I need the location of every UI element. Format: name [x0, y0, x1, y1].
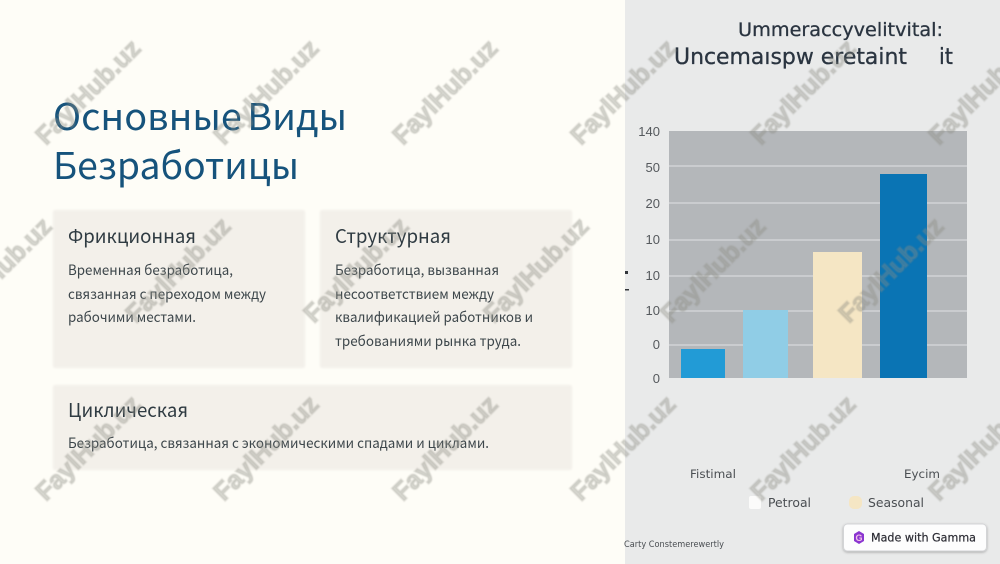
watermark pattern: FaylHub.uz — [565, 34, 681, 150]
panel: structural card: несоответствием между — [335, 284, 495, 304]
chart title: Ummeraccyvelitvital: — [738, 19, 943, 41]
watermark pattern: FaylHub.uz — [298, 212, 414, 328]
bar 1 — [681, 349, 725, 378]
panel: frictional card: Фрикционная — [68, 222, 196, 249]
badge: made with gamma: Made with Gamma — [871, 530, 976, 544]
watermark pattern: FaylHub.uz — [387, 34, 503, 150]
y axis labels: 20 — [646, 196, 660, 211]
watermark pattern: FaylHub.uz — [208, 390, 324, 506]
panel: structural card — [320, 210, 572, 368]
panel: structural card: Структурная — [335, 222, 451, 249]
panel: structural card: Безработица, вызванная — [335, 260, 499, 280]
y axis labels: 10 — [646, 232, 660, 247]
panel: cyclical card: Циклическая — [68, 396, 188, 423]
bar 3 — [813, 252, 862, 378]
icon: gamma logo: G — [855, 533, 863, 543]
watermark pattern: FaylHub.uz — [655, 212, 771, 328]
legend: Seasonal — [868, 496, 924, 510]
y axis labels: 10 — [646, 303, 660, 318]
panel: cyclical card: Безработица, связанная с экономическими спадами и циклами. — [68, 433, 489, 453]
y axis labels: 50 — [646, 160, 660, 175]
watermark pattern: FaylHub.uz — [833, 212, 949, 328]
watermark pattern: FaylHub.uz — [478, 212, 594, 328]
watermark pattern: FaylHub.uz — [208, 34, 324, 150]
legend: Petroal — [768, 496, 811, 510]
y axis labels: 10 — [646, 268, 660, 283]
x axis labels: Fistimal — [690, 467, 736, 481]
watermark pattern: FaylHub.uz — [745, 34, 861, 150]
icon: gamma logo — [854, 531, 864, 544]
plot background — [669, 131, 967, 378]
title: Безработицы — [53, 136, 299, 190]
panel: cyclical card — [53, 385, 572, 470]
panel: frictional card — [53, 210, 305, 368]
panel: structural card: требованиями рынка труда. — [335, 331, 521, 351]
watermark pattern: FaylHub.uz — [745, 390, 861, 506]
panel: frictional card: связанная с переходом между — [68, 284, 267, 304]
watermark pattern: FaylHub.uz — [120, 212, 236, 328]
bar 4 — [880, 174, 927, 378]
panel: right background — [625, 0, 1000, 564]
panel: frictional card: Временная безработица, — [68, 260, 233, 280]
title — [53, 87, 347, 190]
y axis labels: 140 — [638, 124, 660, 139]
panel: left background — [0, 0, 625, 564]
badge: made with gamma — [844, 524, 986, 551]
watermark pattern: FaylHub.uz — [387, 390, 503, 506]
title: Основные Виды — [53, 87, 347, 141]
y axis labels: 0 — [653, 337, 660, 352]
bar chart — [638, 124, 967, 386]
y axis labels — [638, 124, 660, 386]
chart title: Uncemaıspw eretaint — [674, 45, 907, 70]
bar 2 — [743, 310, 788, 378]
legend — [749, 496, 924, 510]
panel: structural card: квалификацией работников и — [335, 307, 533, 327]
y axis labels: 0 — [653, 371, 660, 386]
watermark pattern: FaylHub.uz — [30, 390, 146, 506]
chart title: it — [939, 45, 953, 70]
watermark pattern: FaylHub.uz — [565, 390, 681, 506]
chart title — [674, 19, 953, 70]
panel: frictional card: рабочими местами. — [68, 307, 196, 327]
x axis labels: Eycim — [904, 467, 940, 481]
footnote: Carty Constemerewertly — [624, 540, 725, 550]
axis label fragments — [625, 271, 629, 290]
x axis labels — [690, 467, 940, 481]
watermark pattern: FaylHub.uz — [30, 34, 146, 150]
